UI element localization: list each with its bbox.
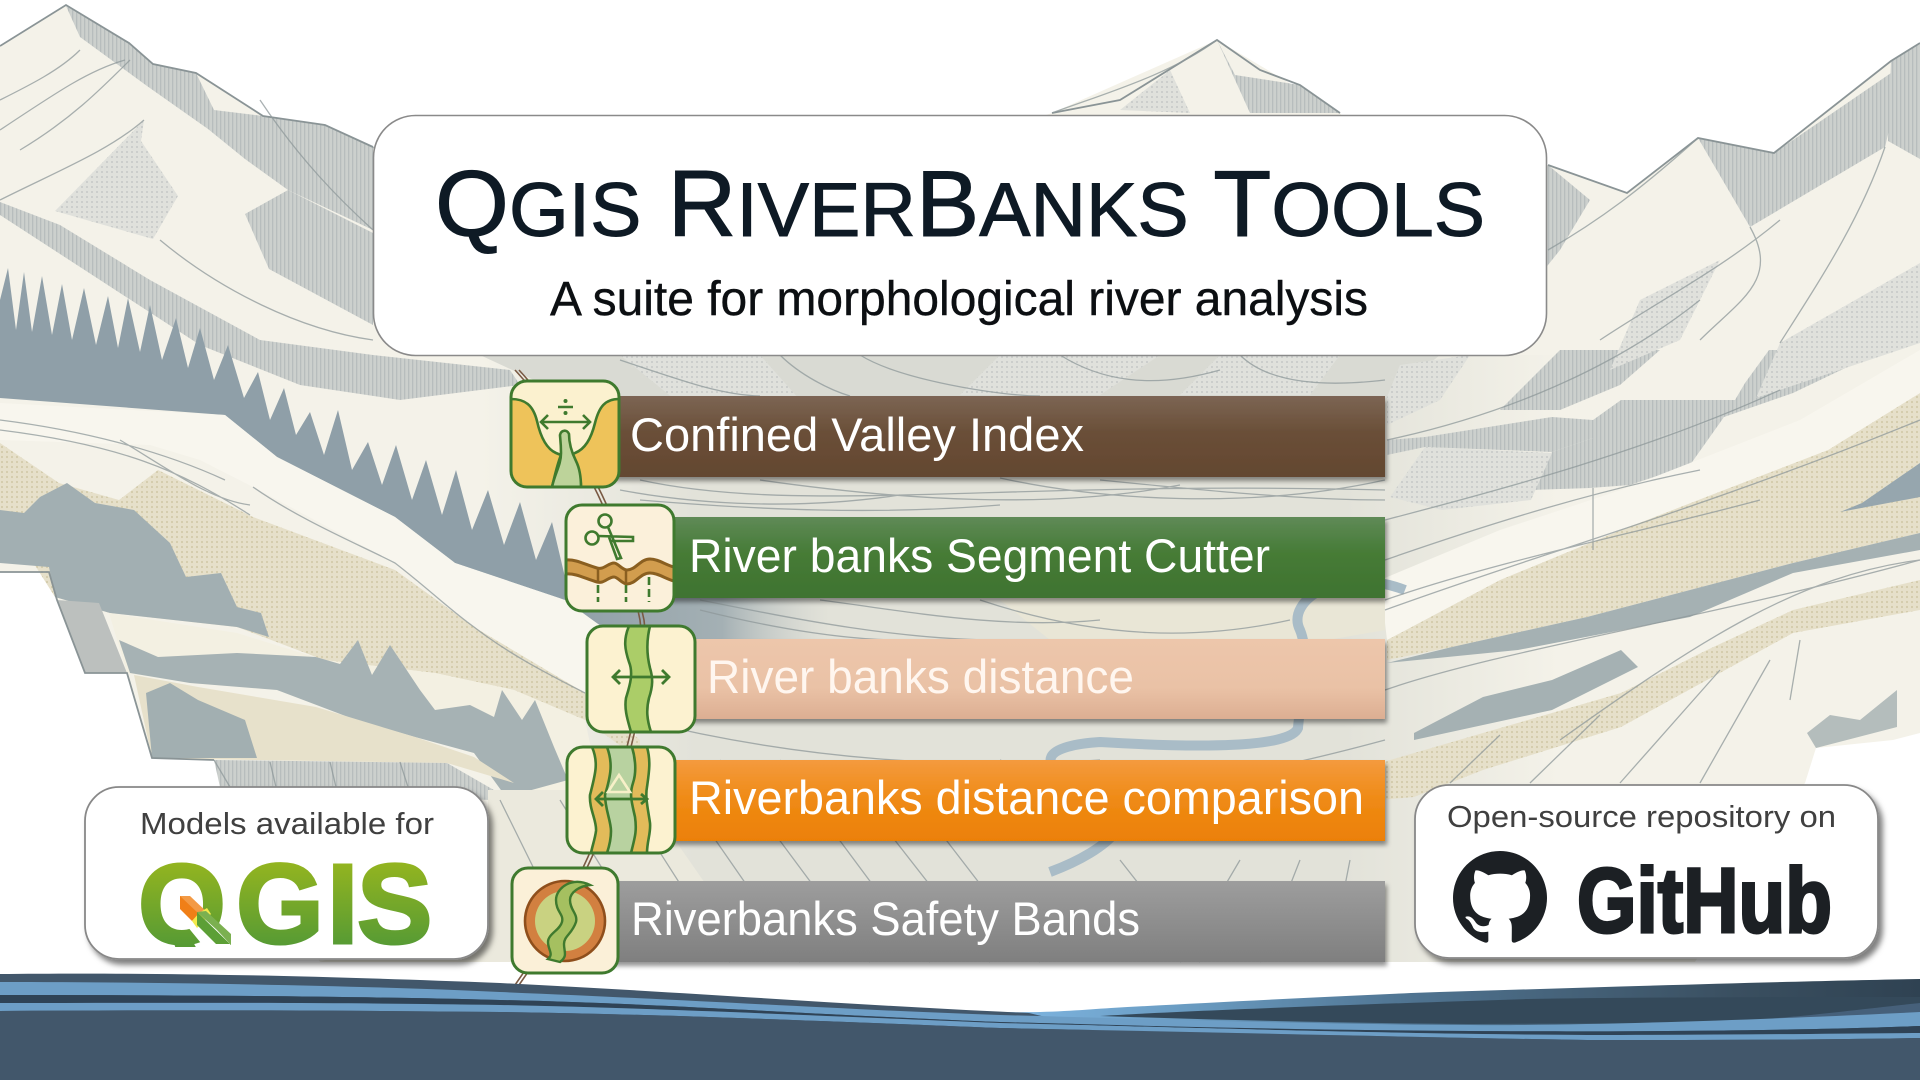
subtitle: A suite for morphological river analysis [550, 273, 1368, 326]
left beige slope [0, 443, 640, 760]
icon: scissors cutting a bank [566, 505, 674, 611]
title panel [374, 116, 1546, 356]
forest band [0, 268, 620, 639]
wave: dark middle band [0, 995, 1920, 1035]
logo: QGIS [141, 862, 430, 947]
tool row: Riverbanks distance comparison [567, 747, 1385, 853]
right mountain light hatch [1387, 260, 1920, 510]
wave: lower light band [0, 1003, 1920, 1040]
icon: valley [511, 381, 619, 487]
wave: back right [1000, 979, 1920, 1040]
icon: bank comparison [567, 747, 675, 853]
tool row: River banks Segment Cutter [566, 505, 1385, 611]
icon: river width [587, 626, 695, 732]
tool row: River banks distance [587, 626, 1385, 732]
bar label: Riverbanks Safety Bands [631, 893, 1140, 946]
bar [610, 881, 1385, 962]
strip two trees [119, 640, 568, 797]
central valley tone [480, 355, 1560, 962]
wave: mid right [1704, 1003, 1920, 1023]
title: QGIS RIVERBANKS TOOLS [435, 151, 1485, 256]
tool row: Confined Valley Index [511, 381, 1385, 487]
strip three bush [146, 683, 257, 758]
logotype: GitHub: GitHub [1577, 850, 1832, 952]
grey block [57, 600, 127, 673]
bar [667, 760, 1385, 841]
panel: GitHub repository [1415, 785, 1878, 958]
forest foot behind bars [560, 598, 830, 639]
bar label: River banks Segment Cutter [689, 530, 1270, 583]
left mountain grey faces [0, 6, 1340, 400]
wave: upper light band [0, 982, 1920, 1031]
wave: inner dark right [1100, 997, 1920, 1024]
bottom water waves [0, 974, 1920, 1080]
rail strip [214, 760, 506, 800]
bar [665, 517, 1385, 598]
caption: Models available for [140, 806, 434, 841]
bar [610, 396, 1385, 477]
strip three [134, 675, 514, 783]
bar label: River banks distance [707, 651, 1134, 704]
valley bands [1000, 560, 1385, 680]
bar label: Confined Valley Index [630, 409, 1084, 462]
tool row: Riverbanks Safety Bands [512, 868, 1385, 973]
right mountain grey faces [1387, 43, 1920, 490]
caption: Open-source repository on [1447, 799, 1836, 834]
bar label: Riverbanks distance comparison [689, 772, 1364, 825]
icon: GitHub mark [1453, 851, 1547, 943]
wave: back left dark [0, 974, 1100, 1030]
logo: QGIS: QGIS [138, 841, 432, 967]
bush cluster [0, 483, 269, 637]
strip two [109, 613, 600, 790]
river connector line [515, 370, 645, 985]
left white slope [0, 403, 640, 760]
wave: main body [0, 1010, 1920, 1080]
ridge outlines [0, 5, 1920, 760]
river [1050, 581, 1405, 872]
panel: QGIS models [85, 787, 488, 967]
lower striped slopes [320, 790, 760, 962]
bar [685, 639, 1385, 719]
right beige bands [1387, 393, 1920, 660]
left mountain light hatch [55, 70, 1340, 420]
icon: safety band circle [512, 868, 618, 973]
